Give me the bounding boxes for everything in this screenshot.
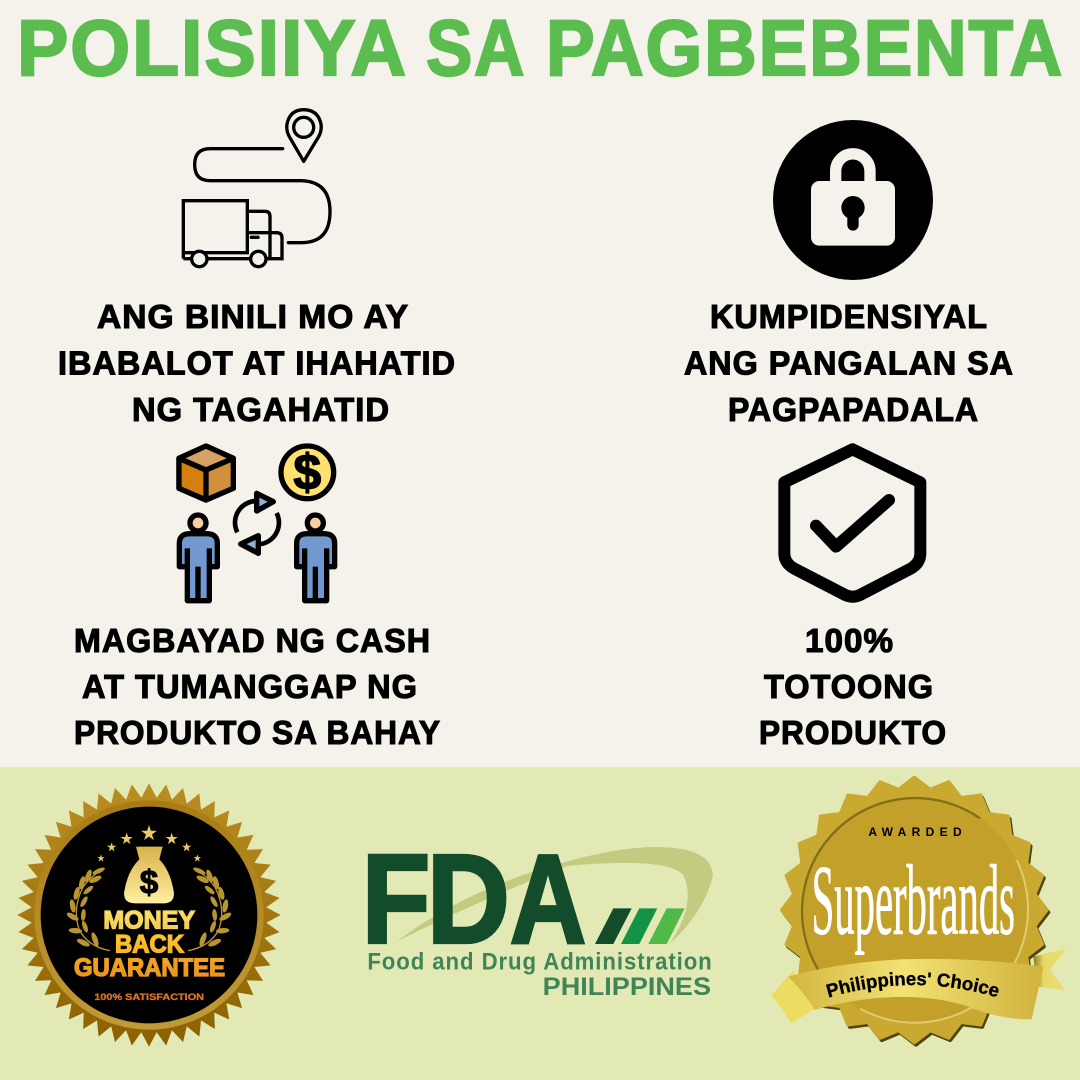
text: packaging and delivery: IBABALOT AT IHAHATID bbox=[58, 344, 456, 382]
badge: money back guarantee: GUARANTEE bbox=[74, 955, 225, 982]
top background panel bbox=[0, 0, 1080, 767]
text: pay cash bbox=[74, 622, 441, 751]
text: confidential name: ANG PANGALAN SA bbox=[684, 344, 1014, 382]
badge: money back guarantee bbox=[12, 778, 286, 1052]
badge: Superbrands bbox=[772, 776, 1066, 1047]
text: pay cash: PRODUKTO SA BAHAY bbox=[74, 714, 441, 751]
icon: cash on delivery exchange bbox=[179, 444, 335, 601]
text: authentic product: PRODUKTO bbox=[759, 714, 947, 751]
text: packaging and delivery: ANG BINILI MO AY bbox=[97, 298, 409, 335]
text: authentic product: 100% bbox=[805, 622, 894, 659]
text: confidential name: KUMPIDENSIYAL bbox=[710, 298, 988, 335]
badge: money back guarantee: $ bbox=[140, 864, 159, 901]
icon: padlock bbox=[773, 120, 933, 280]
icon: delivery truck with route and pin bbox=[183, 110, 330, 267]
logo: FDA Philippines: A bbox=[510, 828, 586, 970]
badge: money back guarantee: 100% SATISFACTION bbox=[94, 992, 204, 1002]
logo: FDA Philippines: D bbox=[427, 828, 510, 970]
bottom background panel bbox=[0, 767, 1080, 1080]
text: packaging and delivery bbox=[58, 298, 456, 428]
logo: FDA Philippines bbox=[362, 828, 713, 1001]
badge: Superbrands: AWARDED bbox=[868, 825, 962, 839]
text: authentic product bbox=[759, 622, 947, 751]
logo: FDA Philippines: PHILIPPINES bbox=[543, 974, 711, 1001]
icon: shield check bbox=[784, 449, 920, 597]
icon: cash on delivery exchange: $ bbox=[293, 444, 321, 500]
badge: Superbrands: Philippines' Choice bbox=[826, 972, 998, 998]
text: confidential name: PAGPAPADALA bbox=[728, 391, 979, 428]
badge: money back guarantee: BACK bbox=[115, 931, 184, 958]
logo: FDA Philippines: Food and Drug Administration bbox=[367, 948, 713, 975]
title bbox=[17, 3, 1064, 92]
text: pay cash: MAGBAYAD NG CASH bbox=[74, 622, 431, 659]
text: packaging and delivery: NG TAGAHATID bbox=[132, 391, 390, 428]
text: authentic product: TOTOONG bbox=[764, 668, 934, 705]
text: pay cash: AT TUMANGGAP NG bbox=[82, 668, 418, 705]
text: confidential name bbox=[684, 298, 1014, 428]
badge: money back guarantee: MONEY bbox=[103, 908, 196, 935]
title: POLISIIYA bbox=[17, 3, 408, 92]
title: SA bbox=[426, 3, 526, 92]
logo: FDA Philippines: F bbox=[362, 828, 430, 970]
